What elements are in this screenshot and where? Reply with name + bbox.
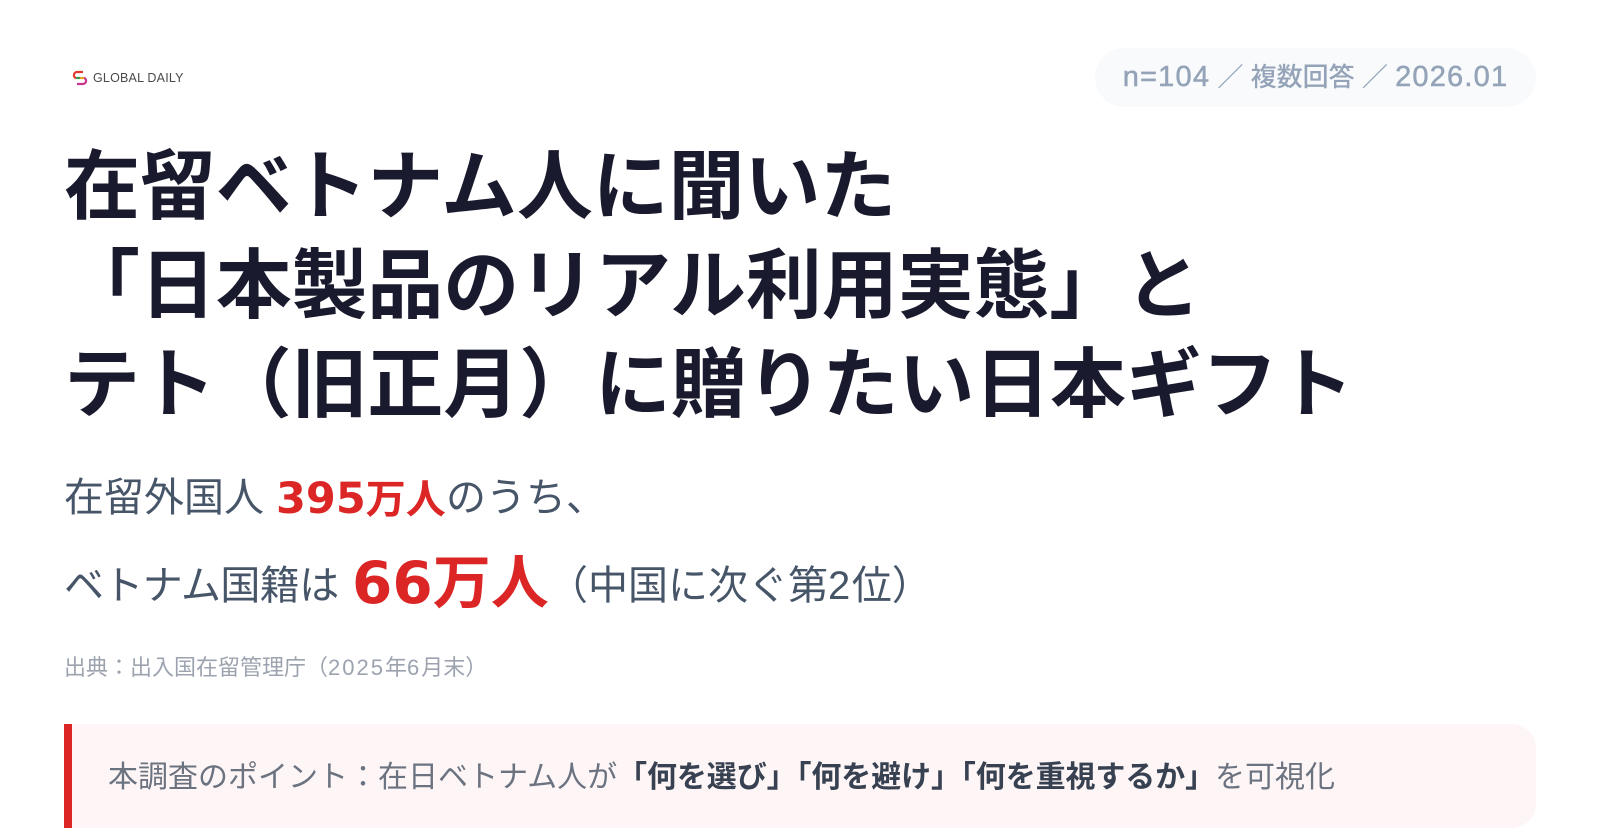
logo: GLOBAL DAILY	[93, 71, 184, 85]
subtitle line 1: 395万人	[276, 467, 446, 525]
title: 在留ベトナム人に聞いた	[64, 125, 896, 235]
source note: 出典：出入国在留管理庁（2025年6月末）	[64, 655, 487, 680]
subtitle line 1: のうち、	[446, 476, 606, 520]
subtitle line 1: 在留外国人	[64, 476, 264, 520]
subtitle line 1	[64, 467, 606, 525]
callout: survey point	[64, 724, 1536, 828]
subtitle line 2: 66万人	[352, 536, 549, 620]
survey info pill: n=104 ／ 複数回答 ／ 2026.01	[1123, 61, 1508, 93]
subtitle line 2	[64, 536, 932, 620]
callout text: 本調査のポイント：在日ベトナム人が「何を選び」「何を避け」「何を重視するか」を可視化	[108, 761, 1335, 794]
subtitle line 2: （中国に次ぐ第2位）	[548, 564, 932, 608]
title: テト（旧正月）に贈りたい日本ギフト	[64, 323, 1353, 433]
title: 「日本製品のリアル利用実態」と	[64, 224, 1201, 334]
title	[64, 125, 1353, 433]
subtitle line 2: ベトナム国籍は	[64, 564, 339, 608]
survey info pill	[1095, 48, 1536, 107]
